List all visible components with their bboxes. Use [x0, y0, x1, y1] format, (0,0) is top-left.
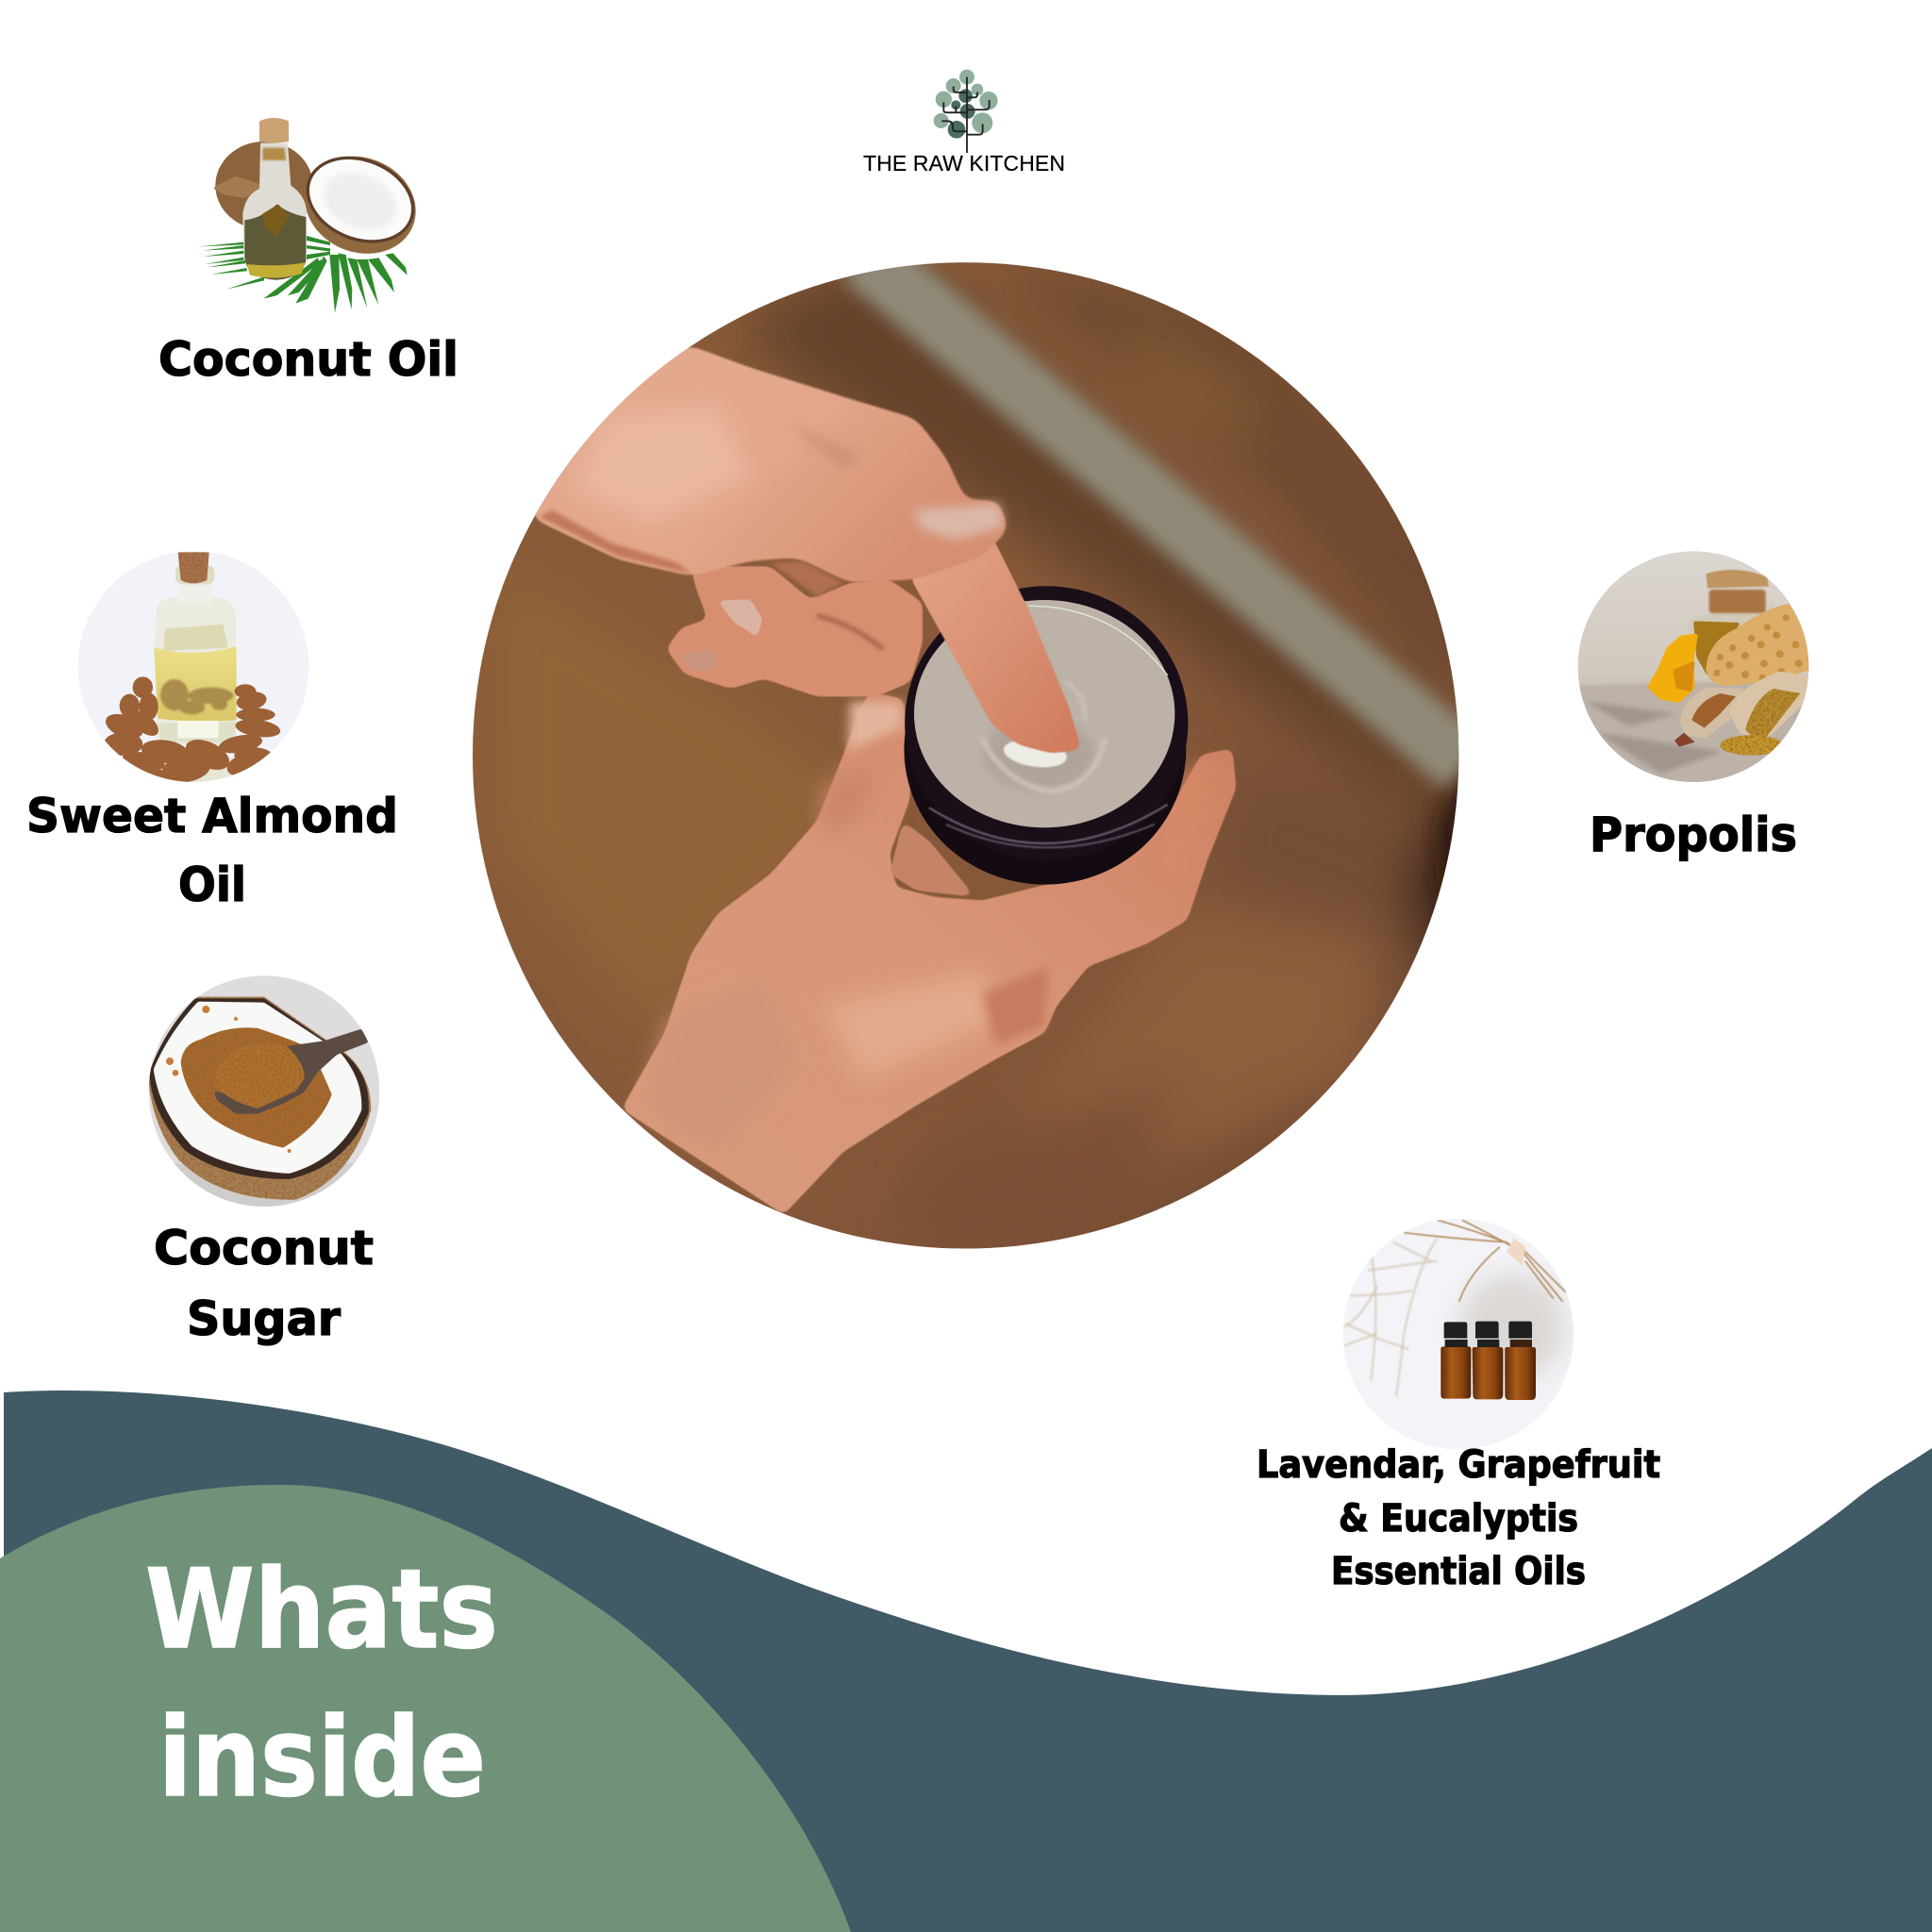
label: Essential Oils [1331, 1550, 1586, 1593]
photo: propolis, honeycomb and pollen [1577, 551, 1809, 782]
label: Coconut Oil [158, 332, 458, 387]
title: Whats inside [145, 1546, 498, 1822]
main photo: hands dipping a finger into a cream jar [453, 245, 1491, 1283]
lower hand [622, 692, 1237, 1215]
logo: The Raw Kitchen [863, 70, 1065, 175]
upper hand and pointing finger [529, 344, 1081, 754]
photo: almonds and oil bottle [77, 551, 308, 782]
title: Whats inside: Whats [145, 1546, 498, 1674]
label [26, 789, 398, 912]
ingredient: propolis [1577, 551, 1809, 862]
jar [904, 586, 1188, 885]
ingredient: coconut oil [158, 118, 458, 387]
photo: coconut shell with sugar [149, 975, 379, 1207]
label [154, 1221, 374, 1346]
icon: tree [934, 70, 998, 153]
label: Oil [178, 858, 246, 912]
label: Coconut [154, 1221, 374, 1275]
background blob: sage green [0, 1485, 851, 1932]
photo: coconut and oil bottle [200, 118, 430, 313]
title: Whats inside: inside [158, 1694, 486, 1822]
ingredient: sweet almond oil [26, 538, 398, 912]
background wave: dark teal [4, 1391, 1932, 1932]
ingredient: coconut sugar [149, 975, 379, 1346]
logo wordmark: THE RAW KITCHEN [863, 151, 1065, 175]
label: Propolis [1590, 808, 1797, 862]
ingredient: essential oils [1257, 1208, 1660, 1593]
photo: three amber bottles with dried twigs [1343, 1219, 1574, 1449]
label [1257, 1443, 1660, 1593]
label: Sweet Almond [26, 789, 398, 843]
label: & Eucalyptis [1339, 1497, 1578, 1541]
label: Sugar [187, 1291, 341, 1346]
label: Lavendar, Grapefruit [1257, 1443, 1660, 1487]
